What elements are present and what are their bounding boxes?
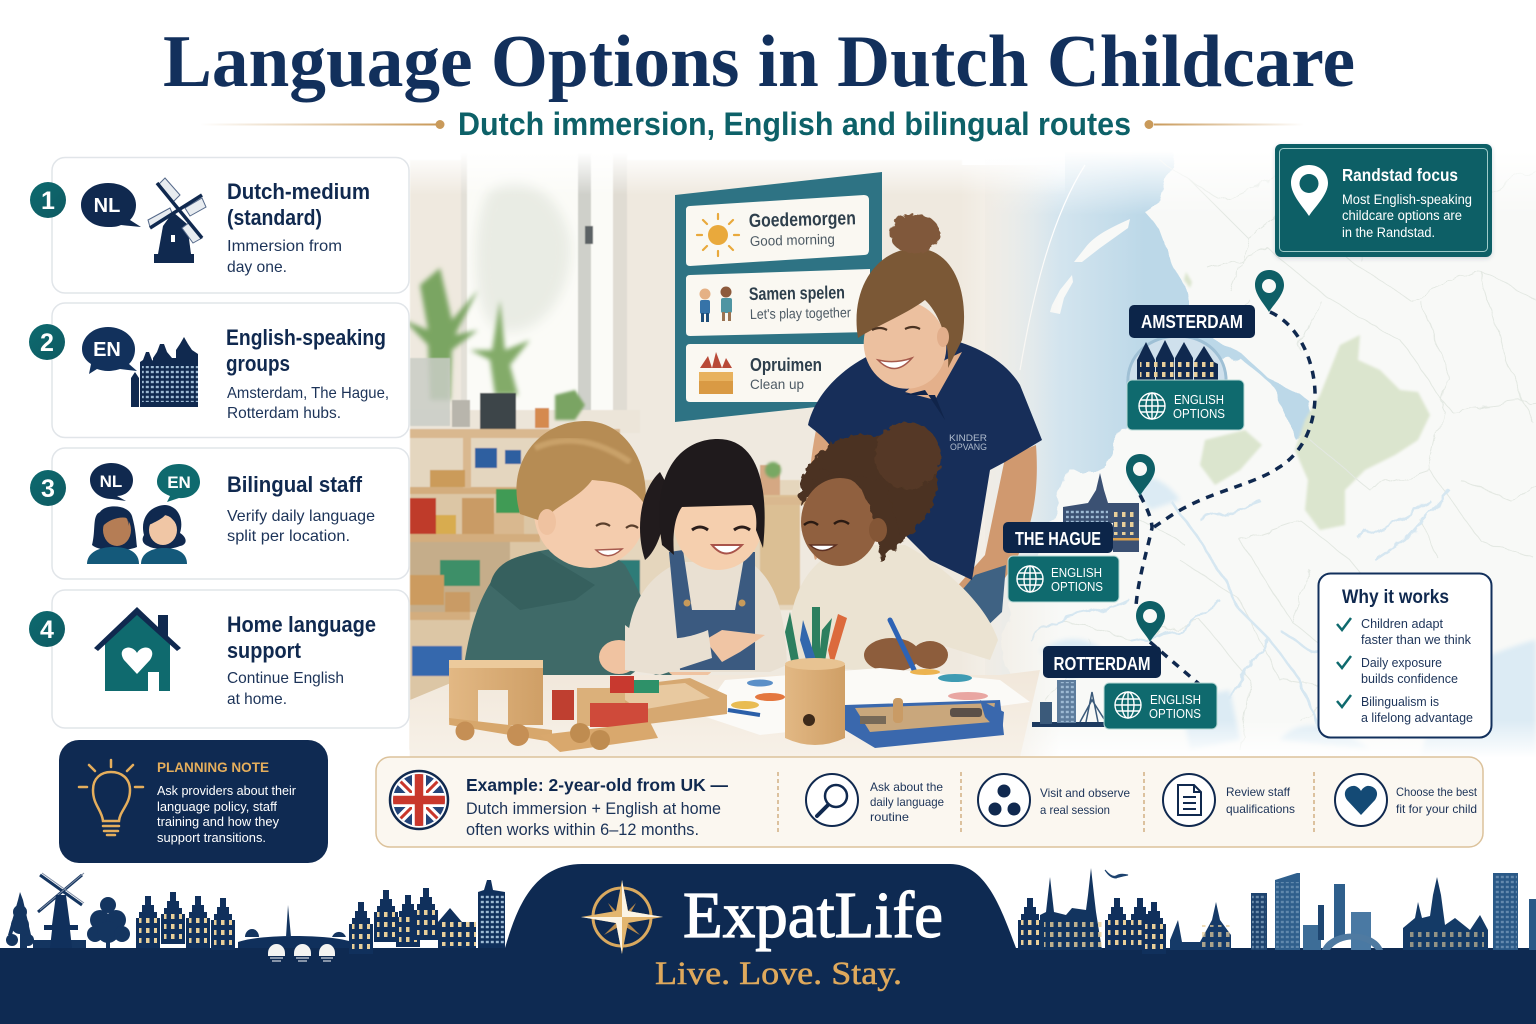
benefit: daily exposure: builds confidence xyxy=(1361,671,1458,686)
card 4 text: Home language xyxy=(227,612,376,637)
left skyline with windmill, canal houses and bridge xyxy=(6,873,505,961)
phrase card: Samen spelen: Samen spelen xyxy=(749,282,845,304)
step: visit and observe: Visit and observe xyxy=(1040,786,1130,800)
benefit: children adapt xyxy=(1337,616,1471,647)
card 1 text: Dutch-medium xyxy=(227,179,370,204)
step number 4: 4 xyxy=(40,616,54,644)
step number 3 xyxy=(30,470,66,506)
step number 2: 2 xyxy=(40,329,54,357)
phrase card: Opruimen: Opruimen xyxy=(750,355,822,375)
pin: Rotterdam xyxy=(1136,601,1165,642)
waterways xyxy=(1030,490,1450,730)
teacher: OPVANG xyxy=(950,442,987,452)
phrase card: Opruimen: Clean up xyxy=(750,376,804,392)
icon: windmill xyxy=(148,178,206,263)
example and next steps bar xyxy=(376,757,1483,847)
phrase card: Samen spelen: Let's play together xyxy=(750,304,851,322)
pin: The Hague xyxy=(1126,454,1155,496)
Randstad focus callout: Most English-speaking xyxy=(1342,192,1472,207)
card 4 text: Continue English xyxy=(227,670,344,687)
phrase card: Goedemorgen: Good morning xyxy=(750,231,835,249)
example text xyxy=(466,775,728,839)
phrase card: Opruimen xyxy=(686,344,870,402)
blue tray xyxy=(845,700,1004,748)
footer band xyxy=(0,864,1536,1024)
planning note: training and how they xyxy=(157,814,279,829)
card 4: Home language support xyxy=(29,590,409,728)
Amsterdam marker group xyxy=(1127,270,1284,430)
Randstad focus callout: childcare options are xyxy=(1342,208,1462,223)
card 2 text: Rotterdam hubs. xyxy=(227,405,341,422)
icon: house with heart xyxy=(94,607,181,691)
Randstad focus callout: in the Randstad. xyxy=(1342,225,1435,240)
badge: English options Rotterdam: OPTIONS xyxy=(1149,706,1201,721)
example text: Dutch immersion + English at home xyxy=(466,800,721,818)
icon: Dutch canal houses xyxy=(131,337,198,407)
logo: compass xyxy=(581,880,663,954)
wooden vehicle xyxy=(449,660,543,725)
step: choose best fit xyxy=(1335,774,1478,826)
card 2 text: English-speaking xyxy=(226,325,386,350)
subtitle with ornaments: Dutch immersion, English and bilingual routes xyxy=(458,106,1131,142)
teacher xyxy=(808,214,1042,650)
label: The Hague xyxy=(1003,522,1113,553)
card 2 text: groups xyxy=(226,351,290,376)
map of the Randstad xyxy=(1000,159,1536,749)
Randstad focus callout xyxy=(1275,144,1492,257)
benefit: children adapt: Children adapt xyxy=(1361,616,1443,631)
step number 4 xyxy=(29,611,65,647)
benefit: bilingualism: Bilingualism is xyxy=(1361,694,1439,709)
planning note xyxy=(59,740,328,863)
card 3 text: split per location. xyxy=(227,528,350,545)
example text: often works within 6–12 months. xyxy=(466,821,699,839)
tagline: Live. Love. Stay. xyxy=(655,956,902,992)
step number 3: 3 xyxy=(41,475,55,503)
benefit: daily exposure xyxy=(1337,655,1458,686)
icon: light bulb xyxy=(79,760,143,835)
step: review qualifications xyxy=(1163,774,1295,826)
phrase card: Goedemorgen: Goedemorgen xyxy=(749,208,856,232)
icon: NL and EN speech bubbles: NL xyxy=(100,472,122,491)
right skyline of Dutch cities xyxy=(1018,868,1536,954)
pencil cup xyxy=(785,607,847,745)
window xyxy=(463,150,627,430)
badge: English options The Hague: ENGLISH xyxy=(1051,565,1102,580)
green areas xyxy=(1184,272,1430,530)
why it works box xyxy=(1318,574,1492,738)
label: Rotterdam: ROTTERDAM xyxy=(1054,654,1150,674)
plants xyxy=(404,268,478,400)
card 2 text: Amsterdam, The Hague, xyxy=(227,385,389,402)
step: choose best fit: fit for your child xyxy=(1396,802,1477,816)
badge: English options Rotterdam: ENGLISH xyxy=(1150,692,1201,707)
table with wooden toys and art supplies xyxy=(410,607,1040,757)
shelves xyxy=(410,430,620,750)
Rotterdam marker group xyxy=(1032,601,1217,729)
label: Amsterdam: AMSTERDAM xyxy=(1141,312,1243,332)
label: Amsterdam xyxy=(1129,305,1255,338)
card 3: Bilingual staff xyxy=(30,448,409,579)
benefit: bilingualism xyxy=(1337,694,1473,725)
planning note: support transitions. xyxy=(157,830,266,845)
badge: English options The Hague: OPTIONS xyxy=(1051,579,1103,594)
islands xyxy=(1050,211,1152,314)
title: Language Options in Dutch Childcare xyxy=(163,21,1355,103)
benefit: daily exposure: Daily exposure xyxy=(1361,655,1442,670)
wooden tray and train xyxy=(590,678,727,725)
skyline: Rotterdam xyxy=(1032,680,1110,727)
label: Rotterdam xyxy=(1043,646,1161,678)
card 2 text xyxy=(226,325,389,422)
icon: EN speech bubble xyxy=(82,327,137,374)
step number 2 xyxy=(29,324,65,360)
icon: UK flag xyxy=(389,770,449,830)
step: visit and observe xyxy=(978,774,1130,826)
land xyxy=(1008,160,1340,752)
card 4 text: at home. xyxy=(227,691,287,708)
classroom photo background xyxy=(404,145,1065,760)
step: ask about routine: routine xyxy=(870,810,909,824)
card 2: English-speaking groups xyxy=(29,303,409,438)
phrase card: Goedemorgen xyxy=(686,195,869,266)
badge: English options Rotterdam xyxy=(1104,683,1217,729)
pin: Amsterdam xyxy=(1255,270,1284,312)
card 3 text: Bilingual staff xyxy=(227,472,362,497)
badge: English options The Hague xyxy=(1008,556,1119,602)
dashed route between cities xyxy=(1136,312,1315,684)
step: review qualifications: Review staff xyxy=(1226,785,1291,799)
badge: English options Amsterdam: ENGLISH xyxy=(1174,392,1224,407)
planning note: language policy, staff xyxy=(157,799,277,814)
card 4 text: support xyxy=(227,638,301,663)
icon: NL and EN speech bubbles xyxy=(90,463,200,502)
step: review qualifications: qualifications xyxy=(1226,802,1295,816)
building: The Hague parliament xyxy=(1063,473,1139,552)
Randstad focus callout: Randstad focus xyxy=(1342,165,1458,185)
logo wordmark: ExpatLife xyxy=(683,879,943,952)
road network xyxy=(1045,160,1536,750)
skyline: Amsterdam houses xyxy=(1128,336,1226,385)
step: choose best fit: Choose the best xyxy=(1396,785,1478,799)
icon: EN speech bubble: EN xyxy=(93,339,121,361)
child: boy in green hoodie xyxy=(461,421,714,700)
card 3 text xyxy=(227,472,375,545)
icon: NL and EN speech bubbles: EN xyxy=(167,473,191,492)
badge: English options Amsterdam xyxy=(1127,380,1244,430)
phrase card: Samen spelen xyxy=(686,269,870,336)
card 1 text: day one. xyxy=(227,259,287,276)
example text: Example: 2-year-old from UK — xyxy=(466,775,728,795)
planning note: PLANNING NOTE xyxy=(157,760,269,775)
icon: NL speech bubble xyxy=(81,183,141,227)
teacher: KINDER xyxy=(949,433,988,443)
icon: NL speech bubble: NL xyxy=(94,195,120,217)
step: visit and observe: a real session xyxy=(1040,803,1110,817)
badge: English options Amsterdam: OPTIONS xyxy=(1173,406,1225,421)
card 1 text: (standard) xyxy=(227,205,322,230)
planning note: Ask providers about their xyxy=(157,783,297,798)
step number 1 xyxy=(30,182,66,218)
why it works box: Why it works xyxy=(1342,587,1449,608)
benefit: bilingualism: a lifelong advantage xyxy=(1361,710,1473,725)
child: girl with curly hair xyxy=(788,423,998,678)
subtitle with ornaments xyxy=(200,106,1304,142)
label: The Hague: THE HAGUE xyxy=(1015,529,1101,549)
The Hague marker group xyxy=(1003,454,1155,602)
icon: location pin xyxy=(1291,165,1328,216)
card 4 text xyxy=(227,612,376,708)
step: ask about routine: daily language xyxy=(870,795,944,809)
step: ask about routine: Ask about the xyxy=(870,780,943,794)
card 1 text: Immersion from xyxy=(227,238,342,255)
card 1: Dutch-medium xyxy=(30,158,409,293)
child: girl in overalls xyxy=(625,439,787,675)
icon: two bilingual staff members xyxy=(87,505,187,564)
step: ask about routine xyxy=(806,774,944,826)
benefit: children adapt: faster than we think xyxy=(1361,632,1471,647)
card 1 text xyxy=(227,179,370,276)
wall poster: Dutch phrases xyxy=(675,172,882,422)
step number 1: 1 xyxy=(41,187,55,215)
card 3 text: Verify daily language xyxy=(227,508,375,525)
